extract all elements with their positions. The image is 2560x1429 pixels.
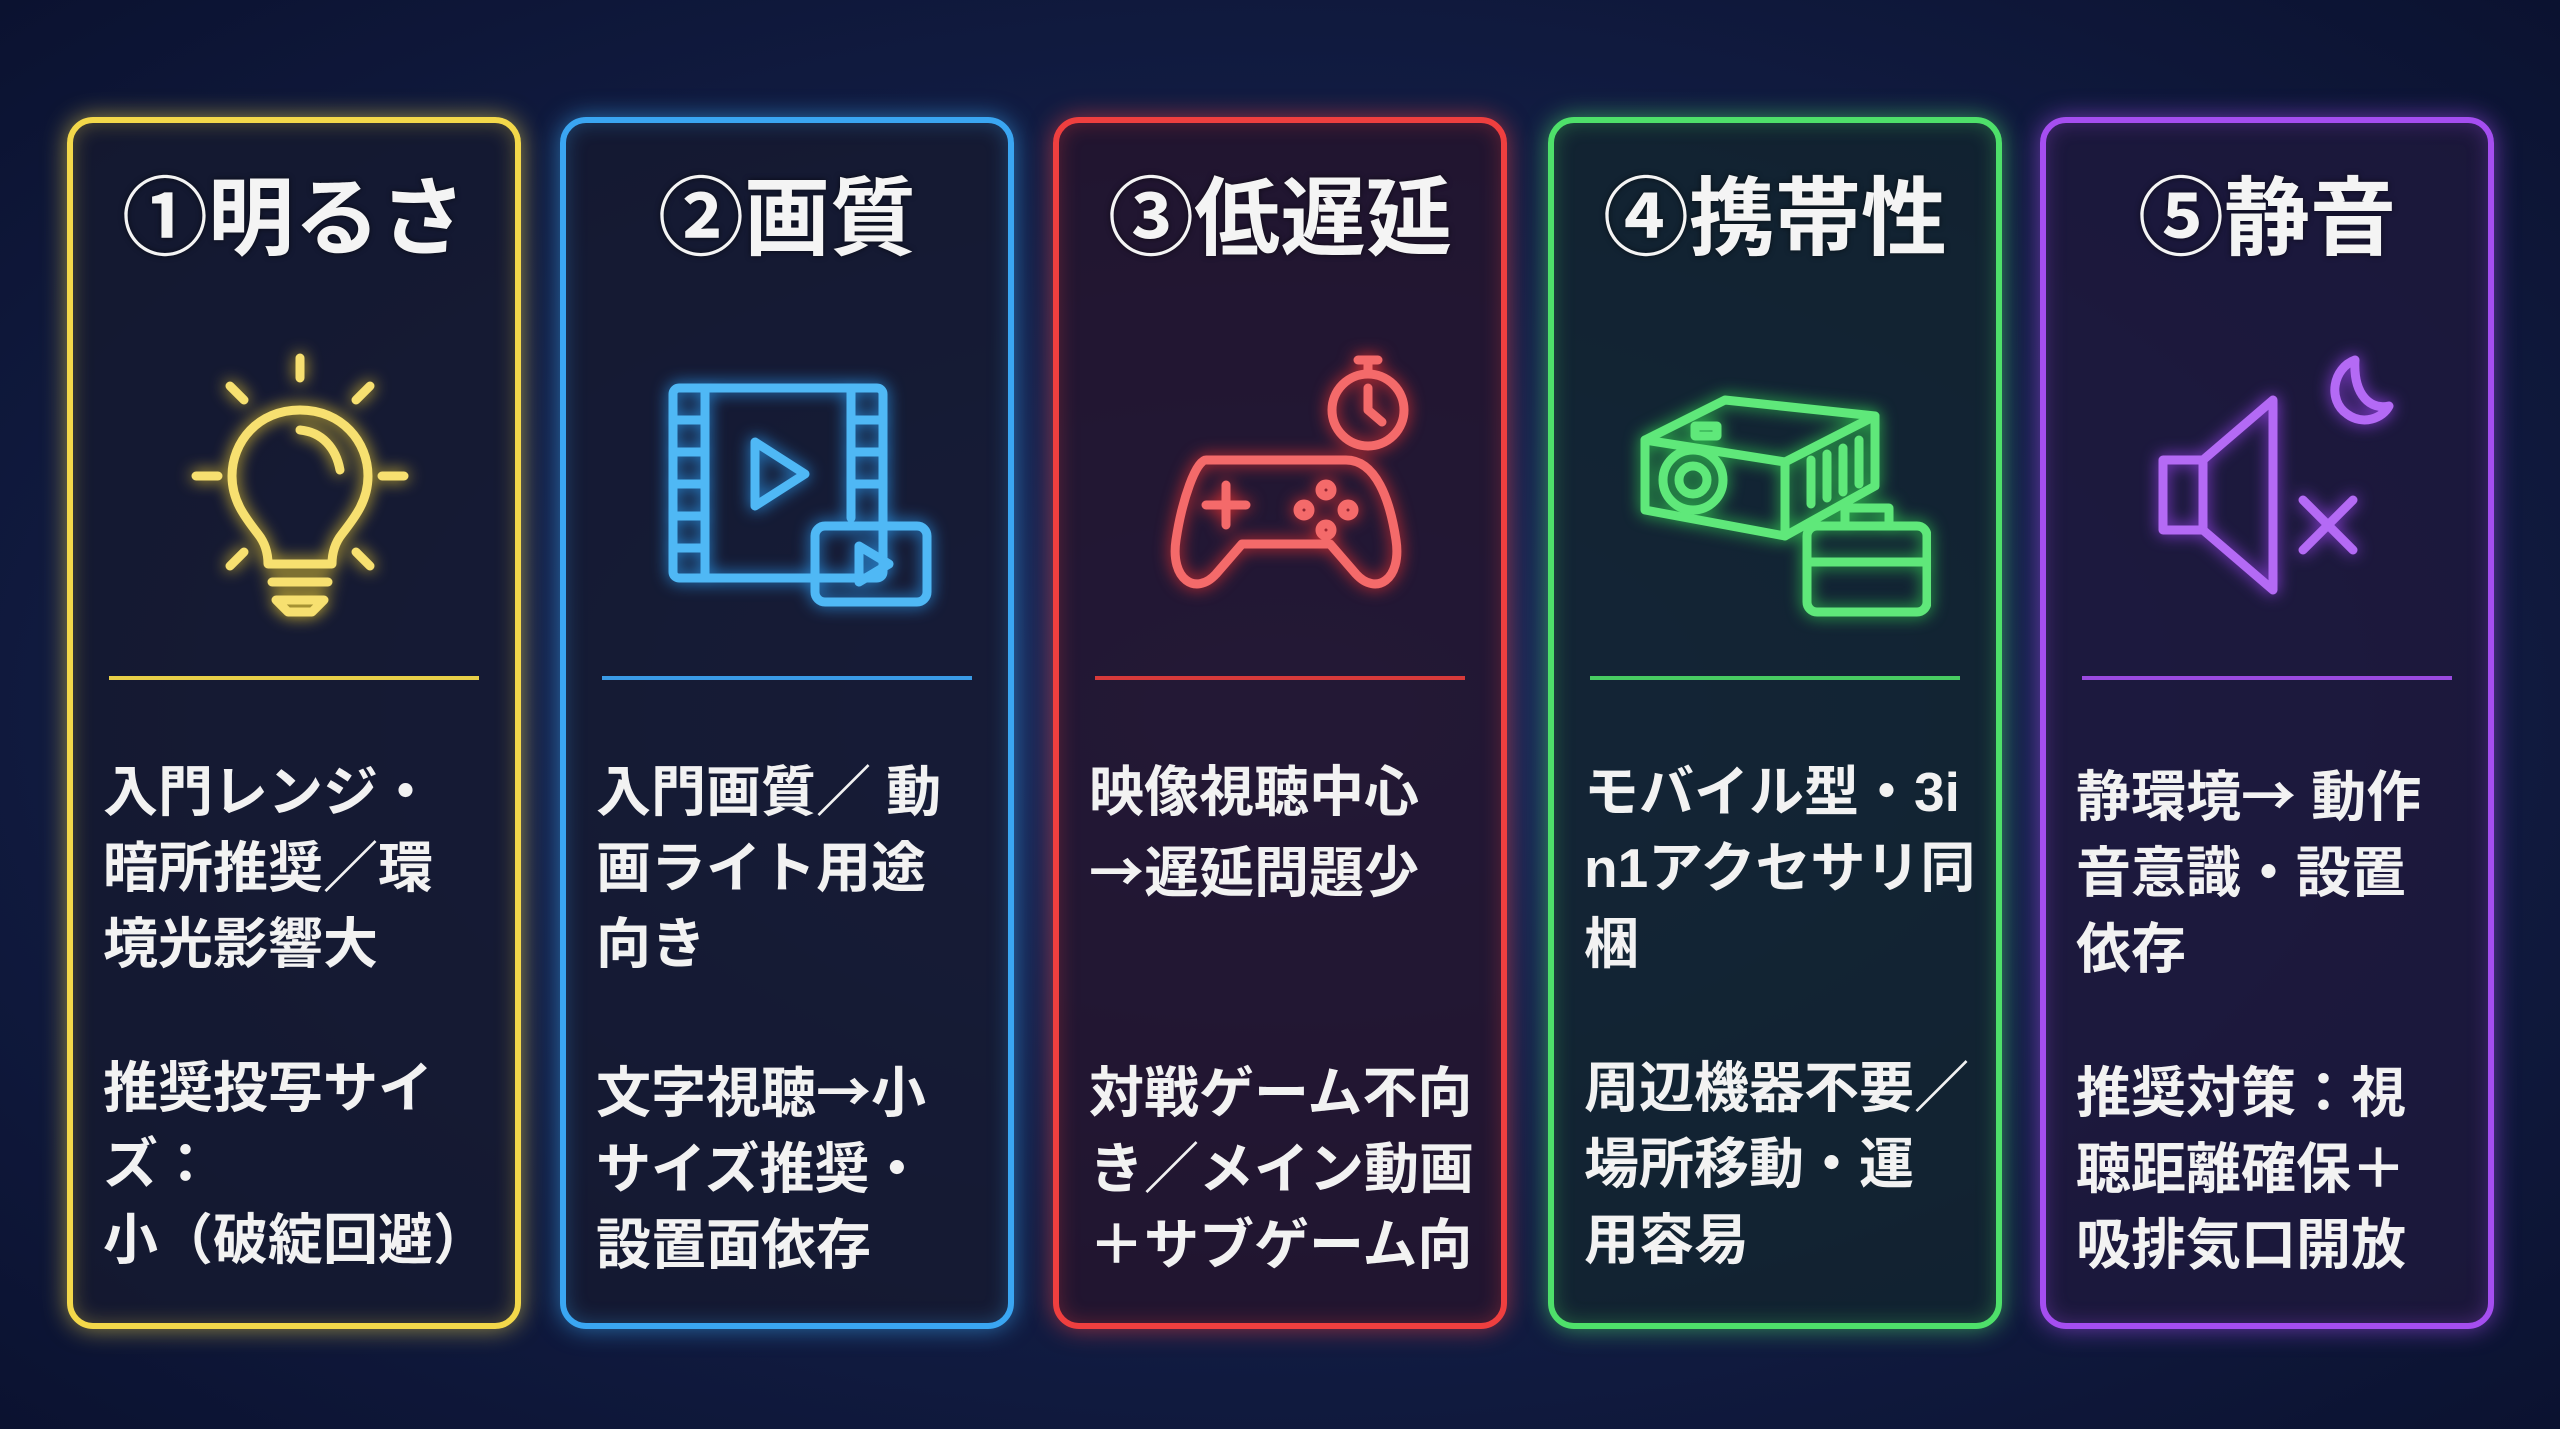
heading: picture quality: ②画質 [658,171,916,267]
panel: picture quality [560,117,1014,1329]
heading: brightness: ①明るさ [122,171,466,267]
text: picture quality: 画ライト用途 [596,837,926,899]
divider [109,676,479,680]
text: portability: 用容易 [1584,1209,1749,1271]
text: low latency: →遅延問題少 [1089,828,1419,908]
text: brightness: 暗所推奨／環 [103,837,433,899]
text: portability: モバイル型・3i [1584,761,1960,823]
text: low latency: 映像視聴中心 [1089,761,1419,823]
text: quietness: 静環境→ 動作 [2076,752,2421,832]
text: low latency: ＋サブゲーム向 [1089,1214,1472,1276]
text: quietness: 音意識・設置 [2076,842,2406,904]
divider [1590,676,1960,680]
text: picture quality [596,761,941,1276]
text: brightness: 小（破綻回避） [103,1209,488,1271]
text: low latency: 対戦ゲーム不向 [1089,1062,1472,1124]
text: quietness: 聴距離確保＋ [2076,1138,2406,1200]
divider [602,676,972,680]
text: portability: 場所移動・運 [1584,1133,1914,1195]
text: portability [1584,761,1975,1271]
heading: low latency: ③低遅延 [1108,171,1452,267]
text: brightness: 境光影響大 [103,913,378,975]
divider [1095,676,1465,680]
panel: portability [1548,117,2002,1329]
text: low latency: き／メイン動画 [1089,1138,1474,1200]
icon: light bulb [182,344,418,630]
icon: projector and briefcase [1628,384,1944,629]
text: brightness: 推奨投写サイ [103,1057,433,1119]
text: picture quality: 設置面依存 [596,1214,871,1276]
icon: muted speaker with moon [2146,346,2402,603]
icon: film and play [656,371,944,619]
text: picture quality: サイズ推奨・ [596,1138,924,1200]
text: picture quality: 文字視聴→小 [596,1048,926,1128]
text: portability: 周辺機器不要／ [1584,1057,1969,1119]
text: portability: 梱 [1584,913,1639,975]
text: brightness: ズ： [103,1133,213,1195]
divider [2082,676,2452,680]
text: brightness [103,761,488,1271]
heading: quietness: ⑤静音 [2138,171,2396,267]
heading: portability: ④携帯性 [1603,171,1947,267]
text: quietness: 依存 [2076,918,2186,980]
panel: brightness [67,117,521,1329]
text: quietness [2076,752,2421,1276]
text: brightness: 入門レンジ・ [103,761,433,823]
text: picture quality: 入門画質／ 動 [596,761,941,823]
panel: low latency [1053,117,1507,1329]
text: picture quality: 向き [596,913,706,975]
text: portability: n1アクセサリ同 [1584,837,1975,899]
text: low latency [1089,761,1474,1276]
text: quietness: 吸排気口開放 [2076,1214,2406,1276]
icon: gamepad with timer [1158,343,1421,600]
text: quietness: 推奨対策：視 [2076,1062,2406,1124]
panel: quietness [2040,117,2494,1329]
